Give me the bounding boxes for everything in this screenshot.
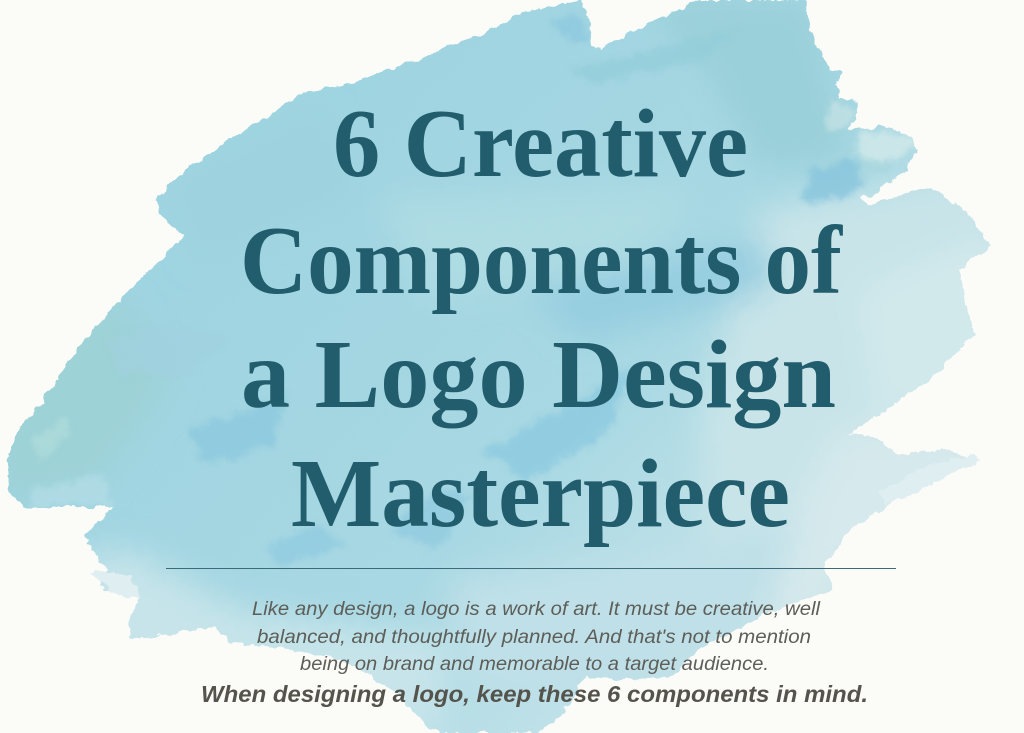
title bbox=[240, 90, 844, 547]
intro text bbox=[252, 599, 821, 675]
title: Components of bbox=[240, 207, 844, 314]
intro text: being on brand and memorable to a target audience. bbox=[300, 654, 769, 675]
faint wisps at stroke edges bbox=[90, 455, 980, 600]
title: 6 Creative bbox=[333, 90, 748, 197]
title: a Logo Design bbox=[241, 321, 836, 428]
divider line bbox=[166, 568, 896, 569]
call to action text: When designing a logo, keep these 6 components in mind. bbox=[201, 681, 868, 707]
intro text: Like any design, a logo is a work of art. It must be creative, well bbox=[252, 599, 821, 620]
title: Masterpiece bbox=[291, 440, 790, 547]
intro text: balanced, and thoughtfully planned. And that's not to mention bbox=[257, 627, 811, 648]
